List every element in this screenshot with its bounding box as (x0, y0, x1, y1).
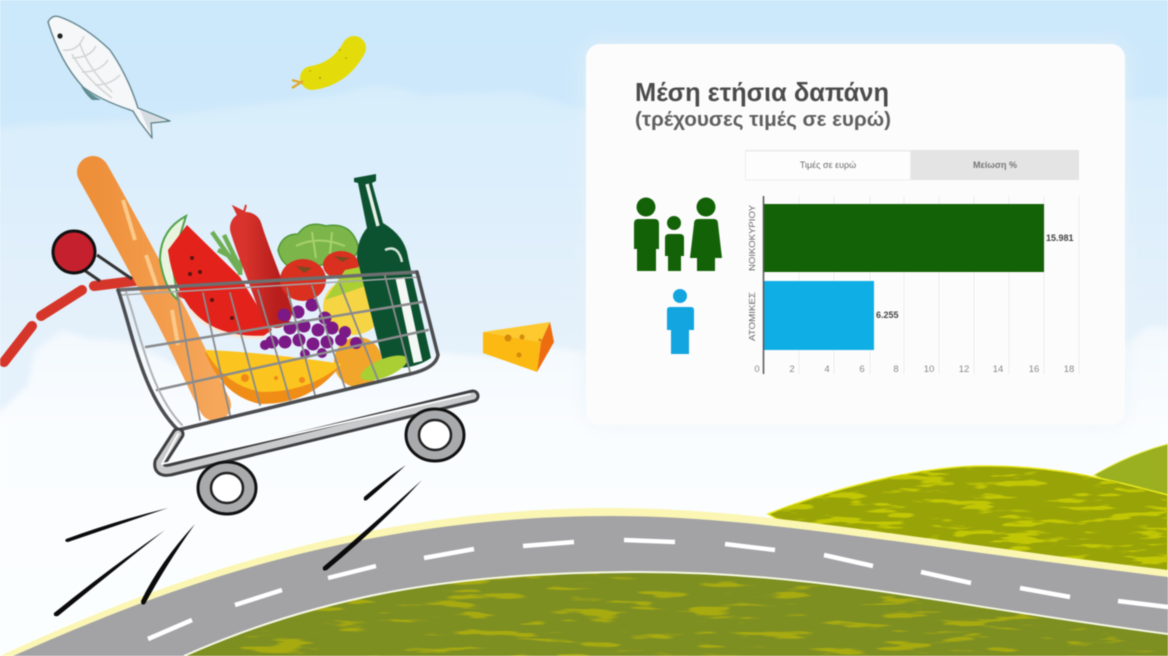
shopping cart with groceries (4, 172, 473, 514)
icon: fish (48, 16, 170, 138)
subheading: (τρέχουσες τιμές σε ευρώ) (635, 109, 891, 131)
category label: households: ΝΟΙΚΟΚΥΡΙΟΥ (748, 204, 757, 271)
cart basket wires (118, 272, 438, 430)
icon: cheese (483, 322, 554, 372)
cart wheels (198, 409, 464, 514)
panel: chart card (586, 44, 1125, 425)
tabs: Τιμές σε ευρώ (800, 160, 856, 170)
panel shadow (586, 44, 1125, 425)
road (0, 508, 1168, 656)
grapes (260, 298, 362, 359)
bar: individuals (764, 281, 874, 350)
handle ball (53, 231, 132, 281)
white cloud bank (0, 325, 1168, 656)
big textured hill (768, 466, 1168, 600)
x axis labels (754, 364, 1074, 375)
tabs: Μείωση % (973, 160, 1017, 170)
x axis labels: 16 (1029, 364, 1039, 375)
x axis labels: 10 (924, 364, 934, 375)
yellow fruit (323, 262, 385, 335)
value label: households: 15.981 (1046, 233, 1074, 243)
peach and pear (334, 337, 411, 387)
road dashes (148, 540, 1168, 639)
banana (205, 350, 342, 404)
salami (234, 205, 276, 312)
speed lines (54, 465, 422, 616)
bar: households (764, 204, 1044, 272)
watermelon (160, 216, 272, 337)
x axis labels: 12 (959, 364, 969, 375)
lower textured hill (150, 560, 1168, 656)
bar chart (748, 196, 1079, 375)
herb sprig (212, 232, 254, 275)
x axis labels: 14 (993, 364, 1003, 375)
x axis labels: 6 (859, 364, 865, 375)
icon: family (634, 198, 722, 271)
baguette (93, 172, 215, 405)
lettuce (278, 224, 358, 270)
heading: Μέση ετήσια δαπάνη (635, 77, 889, 107)
value label: individuals: 6.255 (876, 310, 899, 320)
icon: pickle (292, 48, 354, 88)
x axis labels: 18 (1064, 364, 1074, 375)
x axis labels: 0 (754, 364, 760, 375)
tomatoes (280, 251, 359, 301)
x axis labels: 8 (893, 364, 899, 375)
sausage chain (4, 280, 200, 362)
category label: individuals: ΑΤΟΜΙΚΕΣ (748, 292, 757, 341)
cart chassis (160, 394, 473, 470)
icon: single person (667, 289, 694, 354)
x axis labels: 2 (789, 364, 795, 375)
far hill (1094, 444, 1168, 510)
wine bottle (354, 174, 431, 368)
axis line (762, 196, 764, 374)
x axis labels: 4 (824, 364, 830, 375)
tabs (745, 150, 1079, 180)
